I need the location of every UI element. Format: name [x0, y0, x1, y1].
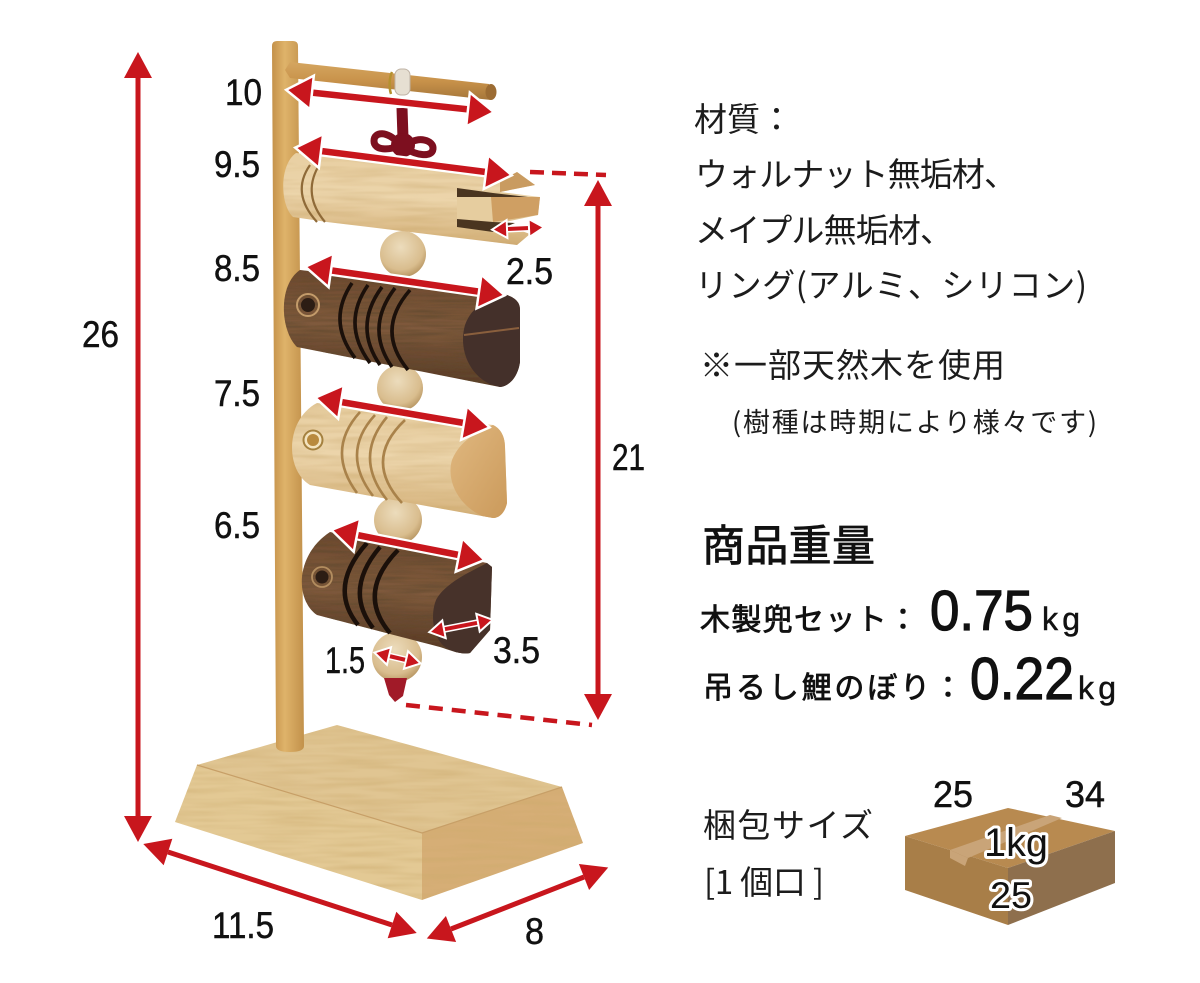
arrow: diameter 3.5	[444, 623, 478, 629]
arrow: bead 1.5	[389, 656, 406, 660]
material heading: 材質：	[694, 93, 793, 141]
base: wooden block	[175, 725, 583, 900]
product illustration: wooden carp stand	[175, 41, 583, 900]
note species: (樹種は時期により様々です)	[732, 401, 1097, 440]
tassel	[384, 678, 407, 702]
label 11.5: 11.5	[212, 905, 274, 946]
material walnut: ウォルナット無垢材、	[695, 148, 1017, 196]
arrow: carp length 7.5	[341, 402, 464, 423]
icon: cardboard box	[905, 808, 1115, 925]
dashed guide: bottom	[406, 705, 592, 725]
label 7.5: 7.5	[214, 373, 260, 414]
note natural wood: ※一部天然木を使用	[700, 339, 1005, 387]
post: vertical pole	[272, 41, 304, 752]
bead	[377, 365, 423, 411]
weight row 1: kg	[1042, 601, 1080, 637]
package count: [1 個口 ]	[704, 856, 824, 904]
arrow: carp length 8.5	[331, 270, 479, 292]
weight row 1	[700, 579, 1080, 643]
box height label: 25	[990, 875, 1032, 916]
weight row 2: 吊るし鯉のぼり：	[703, 663, 963, 707]
knot: red cord	[374, 108, 433, 156]
bead	[372, 632, 422, 682]
weight row 1: 木製兜セット：	[700, 595, 918, 639]
box depth label: 34	[1065, 774, 1105, 815]
label 3.5: 3.5	[493, 630, 540, 671]
label 1.5: 1.5	[325, 640, 365, 681]
material text block	[694, 93, 1097, 440]
label 26: 26	[82, 314, 119, 355]
box width label: 25	[933, 774, 973, 815]
bead	[380, 231, 426, 277]
arrow: carp length 6.5	[357, 535, 459, 555]
label 2.5: 2.5	[506, 251, 553, 292]
peg: horizontal bar	[285, 62, 496, 100]
weight row 2: kg	[1078, 670, 1116, 706]
carp 3: maple	[292, 403, 507, 518]
package label: 梱包サイズ	[703, 799, 873, 847]
box weight label: 1kg	[984, 821, 1048, 865]
arrow: carp length 9.5	[321, 151, 486, 172]
arrow: total height 26	[136, 78, 140, 816]
carp 4: walnut	[302, 532, 492, 653]
label 10: 10	[225, 72, 262, 113]
label 9.5: 9.5	[214, 144, 260, 185]
dimension labels	[82, 72, 645, 952]
package block	[703, 774, 1115, 925]
arrow: tail width 2.5	[507, 228, 529, 229]
label 6.5: 6.5	[214, 505, 260, 546]
material ring: リング(アルミ、シリコン)	[695, 259, 1087, 307]
material maple: メイプル無垢材、	[695, 204, 953, 252]
label 8: 8	[525, 911, 544, 952]
arrow: hanging height 21	[596, 206, 600, 694]
label 8.5: 8.5	[214, 248, 260, 289]
weight row 2: 0.22	[970, 646, 1074, 712]
weight heading: 商品重量	[702, 512, 875, 574]
carp 2: walnut	[284, 270, 520, 387]
dashed guide: top	[530, 172, 606, 175]
arrow: base width 11.5	[168, 852, 392, 925]
bead	[374, 496, 422, 544]
weight row 1: 0.75	[930, 579, 1033, 643]
arrow: base depth 8	[451, 877, 584, 929]
weight block	[700, 512, 1116, 712]
label 21: 21	[612, 437, 645, 478]
carp 1: maple with slit tail	[283, 153, 540, 245]
arrow: peg width 10	[312, 93, 468, 109]
weight row 2	[703, 646, 1116, 712]
